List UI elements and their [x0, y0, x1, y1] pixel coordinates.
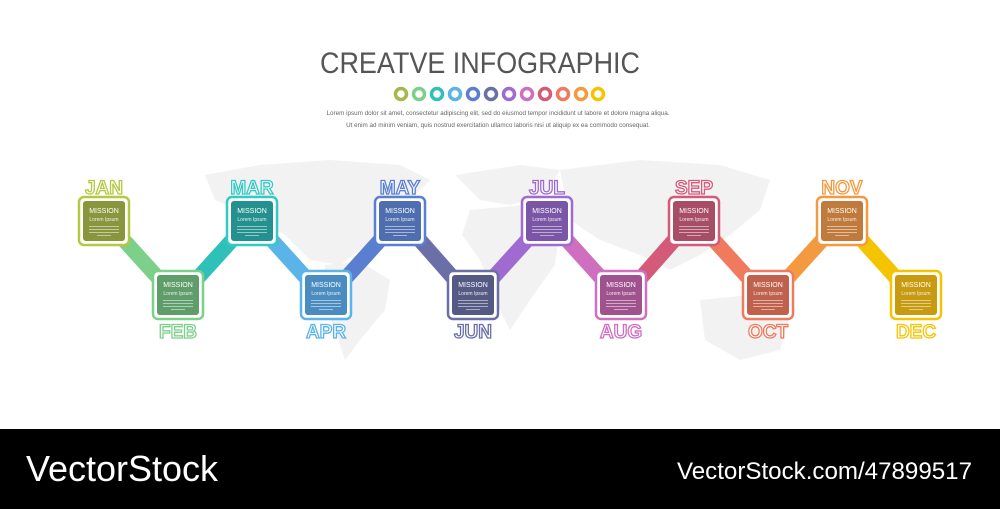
subtitle text: Lorem ipsum dolor sit amet, consectetur adipiscing elit, sed do eiusmod tempor incididunt ut labore et dolore magna aliqua. — [326, 110, 670, 117]
box: SEP: SEP — [675, 178, 713, 199]
box: FEB: MISSION — [163, 282, 193, 289]
box: AUG: AUG — [600, 322, 642, 343]
connector bands — [122, 238, 898, 280]
box: JAN: MISSION — [89, 208, 119, 215]
box: JAN — [79, 178, 129, 245]
box: JUL: Lorem Ipsum — [532, 217, 562, 223]
color dots row — [396, 88, 604, 100]
footer bar: VectorStock.com/47899517 — [677, 458, 972, 485]
box: OCT — [743, 271, 793, 343]
box: SEP: Lorem Ipsum — [679, 217, 709, 223]
box: OCT: OCT — [748, 322, 788, 343]
box: AUG: Lorem Ipsum — [606, 291, 636, 297]
box: MAR: MAR — [230, 178, 274, 199]
box: JUL: MISSION — [532, 208, 562, 215]
box: MAR: MISSION — [237, 208, 267, 215]
box: JAN: JAN — [85, 178, 123, 199]
box: APR — [301, 271, 351, 343]
box: MAY — [375, 178, 425, 245]
box: JUN: MISSION — [458, 282, 488, 289]
box: DEC — [891, 271, 941, 343]
box: OCT: MISSION — [753, 282, 783, 289]
box: MAY: MAY — [380, 178, 421, 199]
box: MAY: MISSION — [385, 208, 415, 215]
box: FEB: Lorem Ipsum — [163, 291, 193, 297]
box: NOV — [817, 178, 867, 245]
box: DEC: MISSION — [901, 282, 931, 289]
box: FEB: FEB — [159, 322, 197, 343]
box: JUN: JUN — [454, 322, 492, 343]
box: FEB — [153, 271, 203, 343]
title: CREATVE INFOGRAPHIC — [320, 47, 640, 80]
subtitle text: Ut enim ad minim veniam, quis nostrud exercitation ullamco laboris nisi ut aliquip ex ea commodo consequat. — [346, 122, 650, 129]
box: JUN — [448, 271, 498, 343]
box: MAY: Lorem Ipsum — [385, 217, 415, 223]
box: SEP — [669, 178, 719, 245]
box: DEC: Lorem Ipsum — [901, 291, 931, 297]
footer bar: VectorStock — [26, 448, 219, 489]
box: JUL: JUL — [529, 178, 565, 199]
box: NOV: MISSION — [827, 208, 857, 215]
box: APR: APR — [306, 322, 346, 343]
world map background — [205, 160, 790, 360]
subtitle text — [326, 110, 670, 129]
box: NOV: Lorem Ipsum — [827, 217, 857, 223]
box: DEC: DEC — [896, 322, 936, 343]
box: JAN: Lorem Ipsum — [89, 217, 119, 223]
box: MAR: Lorem Ipsum — [237, 217, 267, 223]
box: MAR — [227, 178, 277, 245]
box: OCT: Lorem Ipsum — [753, 291, 783, 297]
box: APR: Lorem Ipsum — [311, 291, 341, 297]
box: NOV: NOV — [821, 178, 863, 199]
footer bar — [0, 429, 1000, 509]
box: SEP: MISSION — [679, 208, 709, 215]
box: JUL — [522, 178, 572, 245]
box: JUN: Lorem Ipsum — [458, 291, 488, 297]
box: APR: MISSION — [311, 282, 341, 289]
box: AUG — [596, 271, 646, 343]
box: AUG: MISSION — [606, 282, 636, 289]
